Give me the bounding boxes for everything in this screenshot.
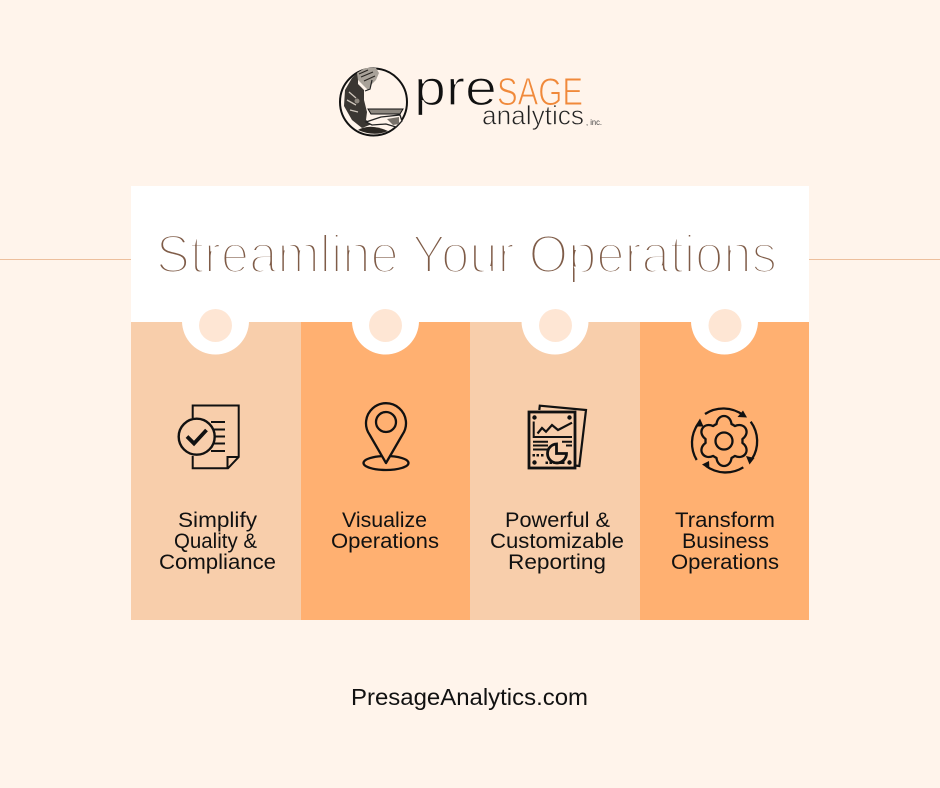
label: Customizable	[490, 530, 624, 553]
panel: transform business operations	[640, 309, 809, 620]
label: Operations	[671, 551, 779, 574]
icon: presage figure emblem	[340, 68, 407, 136]
label: Compliance	[159, 551, 276, 574]
label: Operations	[331, 530, 439, 553]
label: Business	[682, 530, 769, 553]
panel: title banner	[131, 186, 809, 322]
logo wordmark: analytics	[482, 100, 584, 130]
tab marker 2	[352, 309, 419, 354]
icon: report pages	[529, 406, 586, 468]
logo wordmark: , inc.	[586, 118, 602, 127]
label	[671, 509, 779, 574]
panel: visualize operations	[301, 309, 470, 620]
logo wordmark	[414, 60, 602, 130]
panel: powerful and customizable reporting	[470, 309, 640, 620]
label: Powerful &	[505, 509, 610, 532]
tab marker 4	[691, 309, 758, 354]
panel: simplify quality and compliance	[131, 309, 301, 620]
label: Transform	[675, 509, 775, 532]
label: Reporting	[508, 551, 606, 574]
icon: checked document	[179, 406, 239, 468]
logo	[340, 60, 602, 136]
title: Streamline Your Operations	[156, 224, 777, 284]
label: Quality &	[174, 530, 257, 553]
logo wordmark: SAGE	[497, 71, 583, 114]
website url: PresageAnalytics.com	[351, 684, 588, 710]
label	[159, 509, 276, 574]
tab marker 3	[522, 309, 588, 354]
label: Simplify	[178, 509, 258, 532]
label	[331, 509, 439, 553]
icon: map pin	[364, 403, 408, 470]
label: Visualize	[342, 509, 427, 532]
icon: gear with cycle arrows	[692, 408, 757, 472]
tab marker 1	[182, 309, 249, 354]
label	[490, 509, 624, 574]
logo wordmark: pre	[414, 60, 497, 116]
